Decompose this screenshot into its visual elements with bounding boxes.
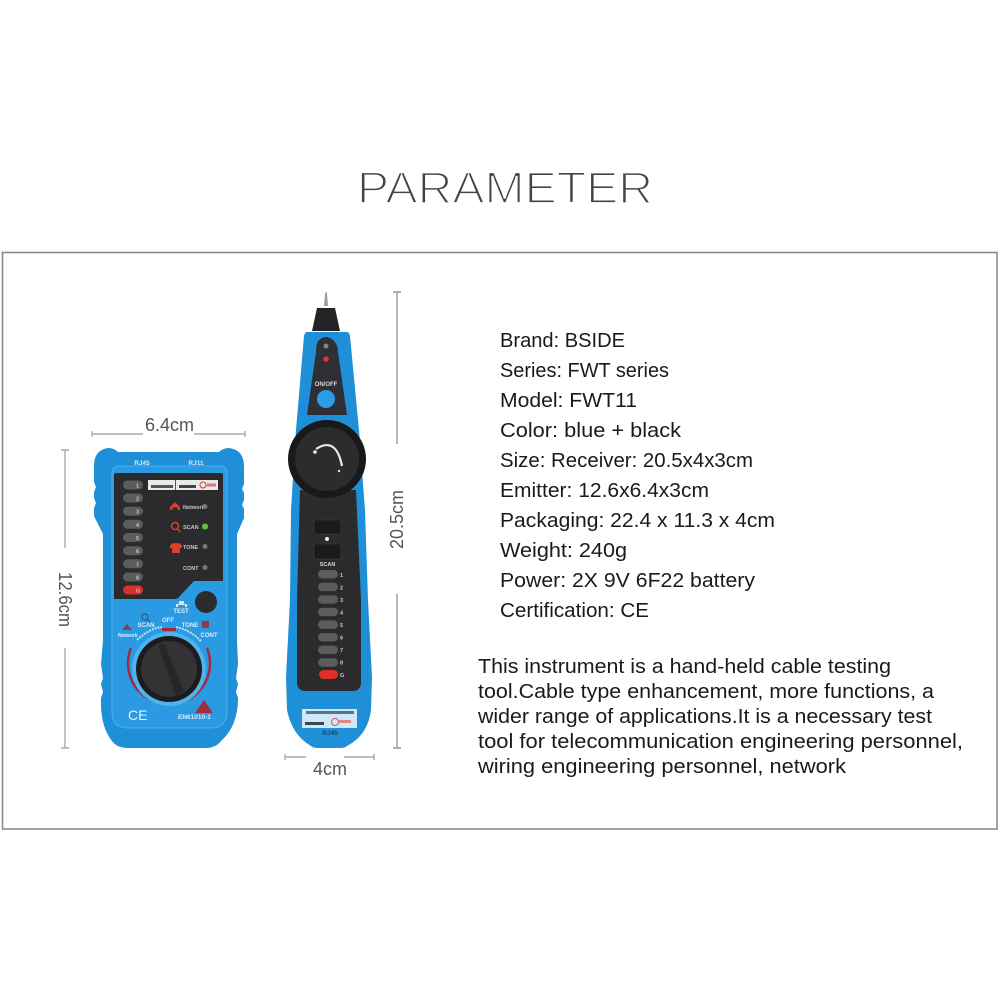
dimension: receiver height 12.6cm: 12.6cm (55, 572, 75, 627)
receiver test button (173, 591, 217, 615)
receiver mode indicators: Network (183, 505, 206, 511)
receiver CE mark and standard: EN61010-1 (178, 714, 211, 721)
title: PARAMETER (357, 164, 653, 213)
probe LED column: 2 (340, 586, 343, 592)
text block: product description: This instrument is a hand-held cable testing (478, 656, 891, 678)
receiver LED column: 2 (136, 496, 139, 502)
receiver test button: TEST (173, 609, 189, 615)
probe LED column: G (340, 673, 344, 679)
receiver LED column: 4 (136, 523, 140, 529)
probe indicator lights (323, 344, 329, 362)
receiver dark panel (114, 473, 223, 599)
text block: specification list: Model: FWT11 (500, 390, 637, 412)
receiver rotary dial (128, 632, 210, 706)
dimension: probe height 20.5cm: 20.5cm (387, 490, 407, 549)
probe LED column: 5 (340, 623, 343, 629)
text block: specification list: Brand: BSIDE (500, 330, 625, 352)
receiver body (94, 448, 244, 748)
probe black tip (312, 308, 340, 331)
receiver mode indicators: TONE (183, 545, 199, 551)
probe upper dark panel (307, 337, 347, 415)
probe LED column (318, 570, 344, 679)
receiver dial labels: CONT (200, 633, 218, 639)
text block: specification list: Size: Receiver: 20.5x4x3cm (500, 450, 753, 472)
probe scan buttons: SCAN (320, 562, 335, 568)
device: receiver emitter unit (94, 448, 244, 748)
text block: product description: wider range of applications.It is a necessary test (477, 706, 932, 728)
receiver dial labels: SCAN (137, 623, 155, 629)
receiver dial labels: OFF (162, 618, 174, 624)
receiver dial labels (118, 614, 218, 641)
text block: specification list (500, 330, 775, 622)
probe on off button (315, 382, 338, 408)
probe LED column: 1 (340, 573, 343, 579)
text block: specification list: Emitter: 12.6x6.4x3cm (500, 480, 709, 502)
probe LED column: 4 (340, 610, 344, 616)
probe lower dark panel (297, 490, 361, 691)
probe LED column: 7 (340, 648, 343, 654)
dimension: receiver width 6.4cm: 6.4cm (145, 415, 194, 435)
dimension: probe width 4cm (285, 754, 374, 779)
text block: product description: tool.Cable type enhancement, more functions, a (478, 681, 935, 703)
probe scan buttons (314, 520, 341, 568)
receiver port labels (134, 460, 204, 467)
receiver LED column: 7 (136, 562, 139, 568)
receiver mode indicators: SCAN (183, 525, 199, 531)
probe body (286, 332, 372, 748)
receiver CE mark and standard: CE (128, 707, 147, 723)
receiver CE mark and standard (128, 700, 213, 723)
receiver dial labels: Network (118, 633, 138, 639)
probe LED column: 3 (340, 598, 343, 604)
probe sticker (302, 709, 357, 728)
receiver LED column: 1 (136, 484, 139, 490)
dimension: receiver height 12.6cm (55, 450, 75, 748)
receiver dial labels: TONE (182, 623, 198, 629)
panel: parameter frame (2, 252, 997, 829)
receiver face (112, 466, 227, 728)
text block: specification list: Weight: 240g (500, 540, 627, 562)
probe on off button: ON/OFF (315, 382, 338, 388)
receiver LED column: G (136, 588, 140, 594)
receiver LED column: 3 (136, 510, 139, 516)
text block: specification list: Color: blue + black (500, 420, 682, 442)
receiver model sticker (148, 480, 218, 490)
probe LED column: 8 (340, 660, 343, 666)
text block: product description (477, 656, 963, 778)
text block: product description: wiring engineering personnel, network (477, 756, 847, 778)
receiver port labels: RJ45 (134, 460, 150, 467)
receiver LED column (123, 480, 143, 594)
text block: specification list: Packaging: 22.4 x 11.3 x 4cm (500, 510, 775, 532)
text block: product description: tool for telecommunication engineering personnel, (478, 731, 963, 753)
probe LED column: 6 (340, 636, 343, 642)
receiver LED column: 5 (136, 536, 139, 542)
probe needle (324, 292, 328, 306)
text block: specification list: Certification: CE (500, 600, 649, 622)
dimension: probe width 4cm: 4cm (313, 759, 347, 779)
receiver mode indicators (170, 502, 208, 572)
device: probe receiver (286, 292, 372, 748)
probe port label: RJ45 (322, 730, 338, 737)
text block: specification list: Series: FWT series (500, 360, 669, 382)
receiver LED column: 6 (136, 549, 139, 555)
receiver port labels: RJ11 (188, 460, 204, 467)
dimension: receiver width 6.4cm (92, 415, 245, 437)
receiver LED column: 8 (136, 576, 139, 582)
text block: specification list: Power: 2X 9V 6F22 battery (500, 570, 755, 592)
receiver mode indicators: CONT (183, 566, 199, 572)
dimension: probe height 20.5cm (387, 292, 407, 748)
probe dial (288, 420, 366, 498)
